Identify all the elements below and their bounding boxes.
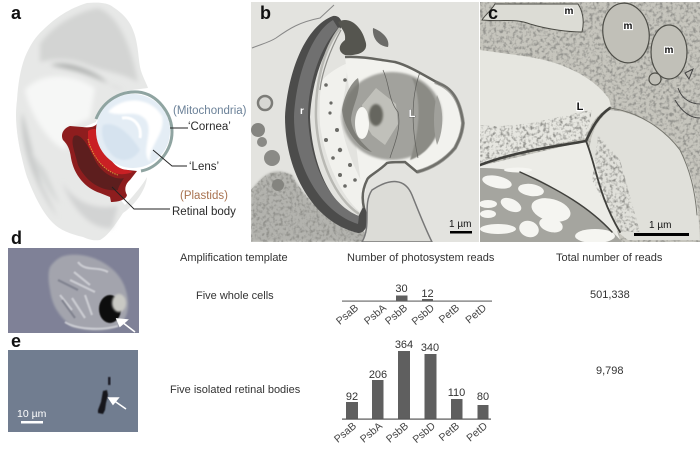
gene labels: PsbB — [383, 302, 410, 327]
organelles in vacuole — [324, 78, 357, 188]
scale label: 1 µm — [649, 220, 671, 231]
gene labels: PsaB — [332, 420, 359, 445]
dark walls — [480, 108, 697, 232]
gene labels: PetD — [463, 302, 489, 326]
total: whole cells: 501,338 — [590, 289, 630, 301]
panel a: cell illustration — [16, 3, 247, 240]
leader lines — [112, 128, 188, 209]
label: cornea: ‘Cornea’ — [188, 121, 231, 133]
label: retinal body: Retinal body — [172, 206, 236, 218]
scale bar — [634, 233, 689, 236]
top left vacuole — [482, 4, 583, 32]
scale bar — [450, 231, 472, 234]
panel tag b: b — [260, 3, 271, 23]
header: photosystem reads: Number of photosystem reads — [347, 252, 495, 264]
values: 92 — [346, 391, 358, 403]
label: plastids: (Plastids) — [180, 190, 228, 202]
total: retinal bodies: 9,798 — [596, 365, 624, 377]
bars — [346, 351, 488, 419]
r label: r — [300, 106, 304, 117]
right membrane texture — [417, 82, 463, 172]
panel d: light micrograph — [8, 248, 139, 333]
arrow — [117, 319, 135, 332]
value 12: 12 — [421, 288, 434, 300]
bar chart: five isolated retinal bodies — [332, 339, 491, 446]
values: 206 — [369, 369, 387, 381]
row label: five whole cells: Five whole cells — [196, 290, 274, 302]
body shading — [22, 8, 138, 228]
gene labels: PsbB — [384, 420, 411, 445]
white vesicles — [479, 168, 615, 243]
scale label: 10 µm — [17, 408, 47, 420]
outer membrane — [345, 57, 463, 208]
gene labels: PsbD — [411, 420, 438, 446]
gene labels: PsbA — [362, 302, 389, 327]
label: lens: ‘Lens’ — [189, 161, 219, 173]
background — [8, 248, 139, 333]
cytoplasm texture — [480, 2, 700, 242]
panel tag d: d — [11, 228, 22, 248]
header: template: Amplification template — [180, 252, 288, 264]
table headers — [180, 252, 663, 264]
m label 3: m — [665, 45, 674, 56]
m label 1: m — [565, 6, 574, 17]
values: 364 — [395, 339, 413, 351]
retinal body — [62, 121, 137, 202]
lens — [96, 94, 170, 168]
lower right granular tissue — [362, 182, 432, 242]
lens region upper — [480, 50, 611, 165]
background — [251, 2, 479, 242]
cell texture — [58, 262, 118, 329]
granule band — [480, 110, 592, 165]
value 30: 30 — [395, 283, 408, 295]
bar chart: five whole cells — [334, 283, 492, 328]
lens body — [342, 70, 442, 160]
debris at lower left — [251, 5, 372, 242]
gene labels: PsbA — [358, 420, 385, 445]
retina crescent — [285, 16, 388, 233]
panel c: electron micrograph — [479, 0, 700, 243]
panel b: electron micrograph — [251, 2, 479, 242]
values: 110 — [448, 387, 465, 399]
gene labels: PetD — [464, 420, 490, 444]
cell body — [16, 3, 148, 240]
gene labels — [334, 302, 489, 328]
panel tag a: a — [11, 3, 22, 23]
bar PsbB — [396, 296, 408, 301]
isolated retinal body — [98, 390, 108, 414]
white vacuole around lens — [320, 63, 366, 212]
gene labels: PetB — [437, 420, 462, 444]
panel tag e: e — [11, 331, 21, 351]
row label: isolated retinal bodies: Five isolated retinal bodies — [170, 384, 301, 396]
small fragment — [108, 377, 110, 385]
mitochondrion outlines — [598, 0, 687, 85]
gene labels: PsaB — [334, 302, 361, 327]
header: total reads: Total number of reads — [556, 252, 663, 264]
values: 340 — [421, 342, 439, 354]
bar PsbD — [422, 299, 433, 301]
L label: L — [577, 101, 584, 113]
values — [346, 339, 489, 403]
lens region right — [589, 110, 700, 240]
L label: L — [409, 108, 416, 120]
m label 2: m — [624, 21, 633, 32]
values: 80 — [477, 391, 489, 403]
dark spot and membranes — [675, 69, 700, 118]
cytoplasm — [480, 2, 700, 242]
background — [8, 350, 138, 432]
granule band right — [592, 135, 640, 232]
gene labels — [332, 420, 490, 446]
panel tag c: c — [488, 3, 498, 23]
gene labels: PetB — [437, 302, 462, 326]
axis — [342, 300, 492, 302]
gene labels: PsbD — [410, 302, 437, 328]
panel e: light micrograph — [8, 350, 138, 432]
label: mitochondria: (Mitochondria) — [173, 105, 247, 117]
axis — [342, 418, 491, 420]
arrow — [109, 398, 126, 409]
highlight — [112, 294, 126, 312]
scale label: 1 µm — [449, 219, 471, 230]
cell — [48, 255, 128, 331]
dark body — [99, 295, 121, 323]
scale bar — [21, 421, 43, 424]
cornea — [96, 92, 172, 171]
vesicle network — [480, 168, 622, 242]
lower triangle cell — [480, 141, 620, 240]
